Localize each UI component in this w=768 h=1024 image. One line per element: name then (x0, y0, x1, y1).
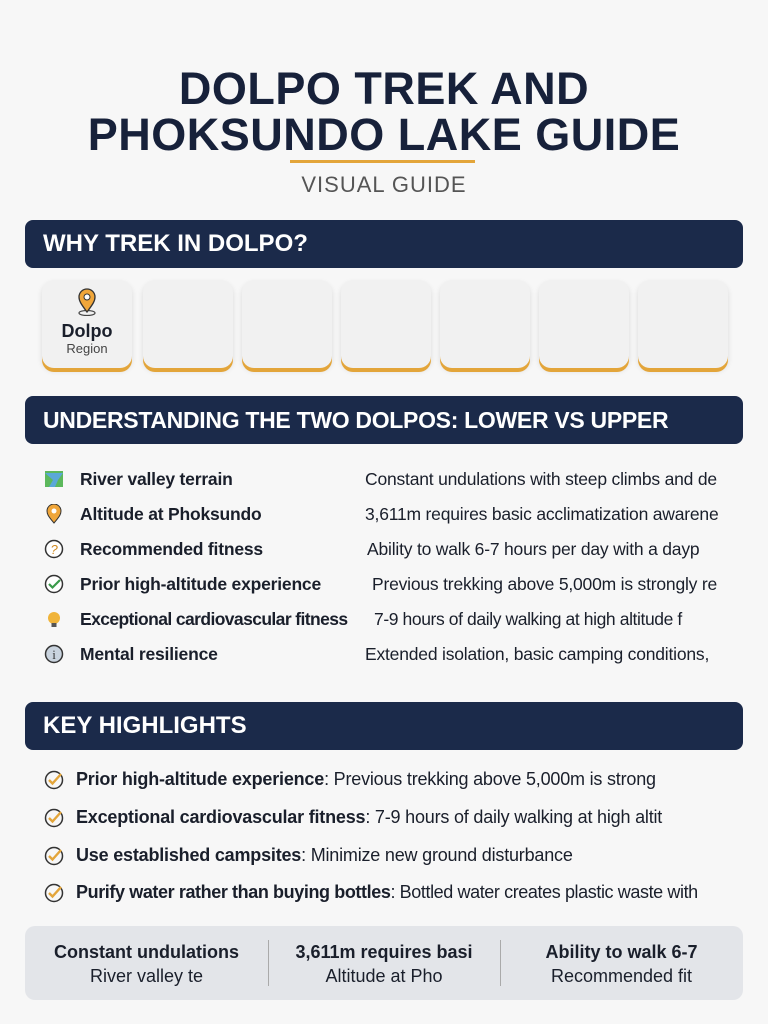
card: Dolpo region: Region (66, 341, 108, 356)
row: cardio: Exceptional cardiovascular fitness (80, 609, 348, 629)
row: mental: Extended isolation, basic camping conditions, (365, 644, 709, 664)
row: river valley (45, 469, 717, 489)
row: altitude: 3,611m requires basic acclimatization awarene (365, 504, 718, 524)
title: DOLPO TREK AND (179, 63, 589, 114)
card: Dolpo region (42, 280, 132, 368)
stat 1 (54, 942, 239, 986)
highlight 1: Prior high-altitude experience: Previous trekking above 5,000m is strong (76, 769, 656, 789)
title (88, 63, 680, 160)
highlight 4: Purify water rather than buying bottles: Bottled water creates plastic waste with (76, 882, 698, 902)
heading: key highlights: KEY HIGHLIGHTS (43, 712, 247, 739)
highlights list (44, 769, 698, 902)
subtitle: VISUAL GUIDE (301, 172, 467, 197)
row: fitness (44, 539, 699, 559)
row: fitness: ? (50, 542, 58, 557)
stat 2: Altitude at Pho (325, 966, 443, 986)
row: fitness: Recommended fitness (80, 539, 263, 559)
row: cardio (48, 609, 682, 629)
row: mental: i (52, 647, 56, 662)
card: Dolpo region: Dolpo (62, 321, 112, 341)
heading: why trek (25, 220, 743, 268)
stat 1: Constant undulations (54, 942, 239, 962)
row: mental: Mental resilience (80, 644, 218, 664)
stat 2 (295, 942, 473, 986)
row: cardio: 7-9 hours of daily walking at high altitude f (374, 609, 682, 629)
summary bar (25, 926, 743, 1000)
title: PHOKSUNDO LAKE GUIDE (88, 109, 680, 160)
stat 3 (545, 942, 698, 986)
row: prior experience (44, 574, 717, 594)
row: prior experience: Previous trekking above 5,000m is strongly re (372, 574, 717, 594)
highlight 3: Use established campsites: Minimize new ground disturbance (76, 845, 573, 865)
row: fitness: Ability to walk 6-7 hours per day with a dayp (367, 539, 699, 559)
row: mental (44, 644, 709, 664)
row: altitude (46, 504, 718, 524)
stat 1: River valley te (90, 966, 203, 986)
stat 3: Recommended fit (551, 966, 692, 986)
row: altitude: Altitude at Phoksundo (80, 504, 262, 524)
stat 3: Ability to walk 6-7 (545, 942, 698, 962)
row: prior experience: Prior high-altitude experience (80, 574, 321, 594)
stat 2: 3,611m requires basi (295, 942, 473, 962)
heading: two dolpos (25, 396, 743, 444)
heading: why trek: WHY TREK IN DOLPO? (43, 230, 308, 257)
comparison rows (44, 469, 718, 664)
row: river valley: River valley terrain (80, 469, 233, 489)
cards row (40, 288, 730, 372)
heading: key highlights (25, 702, 743, 750)
row: river valley: Constant undulations with steep climbs and de (365, 469, 717, 489)
highlight 2: Exceptional cardiovascular fitness: 7-9 hours of daily walking at high altit (76, 807, 662, 827)
heading: two dolpos: UNDERSTANDING THE TWO DOLPOS: LOWER VS UPPER (43, 407, 668, 433)
